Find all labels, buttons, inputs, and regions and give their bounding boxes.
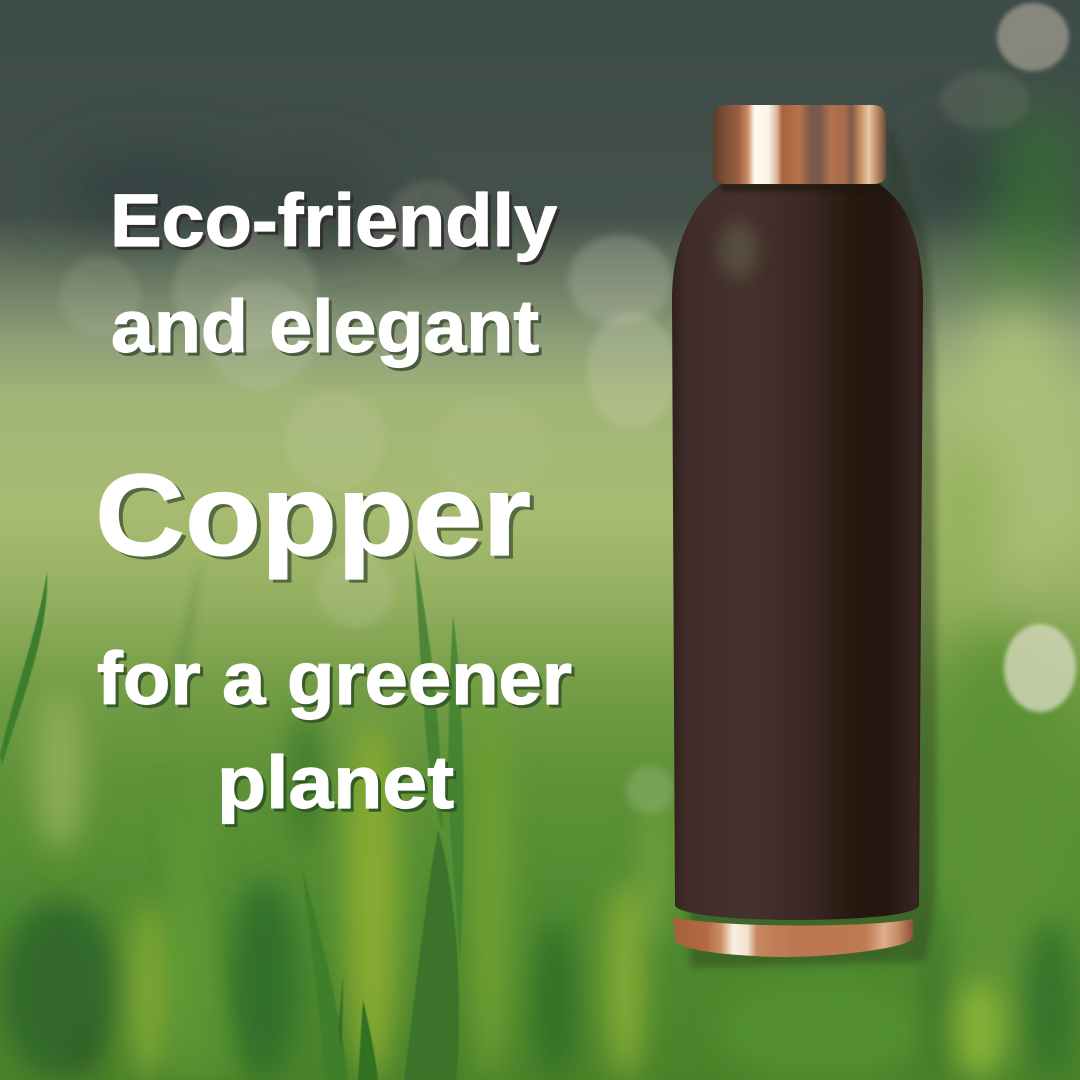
dark top lobes xyxy=(50,100,1080,305)
heading line: planet: planet xyxy=(217,741,454,824)
text shadows xyxy=(99,182,575,827)
neck shadow xyxy=(722,183,882,191)
headline text xyxy=(95,179,575,827)
heading line: Eco-friendly: Eco-friendly xyxy=(110,179,557,262)
product: copper bottle xyxy=(672,105,937,968)
bottle cap xyxy=(713,105,886,184)
text shadows: Copper xyxy=(99,453,535,583)
text shadows: planet xyxy=(220,744,457,827)
bokeh lights xyxy=(60,3,1076,814)
heading line: for a greener: for a greener xyxy=(97,637,572,720)
grass blades xyxy=(0,550,464,1080)
text shadows: Eco-friendly xyxy=(113,182,560,265)
copper base ring xyxy=(673,917,913,957)
text shadows: and elegant xyxy=(114,288,542,371)
heading line: and elegant: and elegant xyxy=(111,285,539,368)
grass streaks xyxy=(0,690,1076,1080)
bottle body xyxy=(672,183,923,920)
heading word: Copper: Copper xyxy=(95,450,531,580)
shoulder reflection xyxy=(718,222,758,278)
right side light patch xyxy=(920,300,1080,1050)
text shadows: for a greener xyxy=(100,640,575,723)
bottle shadow xyxy=(690,125,937,968)
